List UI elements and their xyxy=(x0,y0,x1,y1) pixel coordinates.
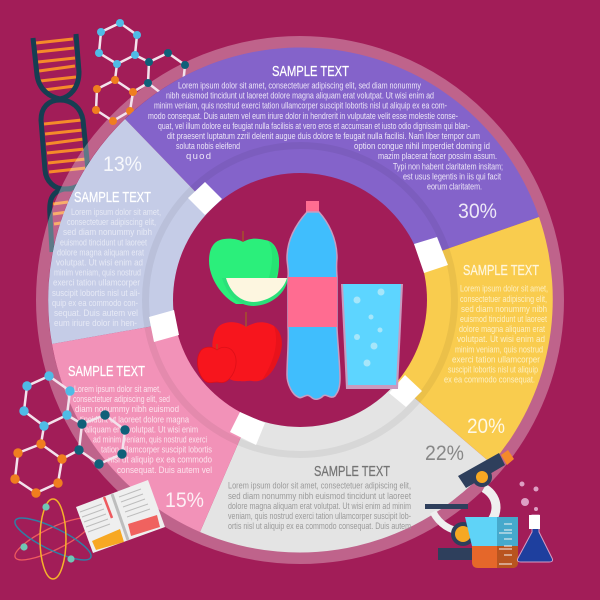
text block: purple segment: minim veniam, quis nostrud exerci tation ullamcorper suscipit lobortis nisl ut aliquip ex ea com- xyxy=(154,101,447,112)
text block: yellow segment: euismod tincidunt ut laoreet xyxy=(460,314,547,325)
text block: yellow segment: dolore magna aliquam erat xyxy=(459,324,545,335)
text block: purple segment: dit praesent luptatum zzril delenit augue duis dolore te feugait nulla facilisi. Nam liber tempor cum xyxy=(167,131,480,142)
text block: pink segment: SAMPLE TEXT xyxy=(68,363,145,380)
text block: purple segment: option congue nihil imperdiet doming id xyxy=(354,141,490,152)
text block: pink segment: Lorem ipsum dolor sit amet, xyxy=(74,384,161,395)
text block: pink segment: consequat. Duis autem vel xyxy=(117,465,212,476)
icon: upper molecule xyxy=(92,19,189,125)
icon: green apple with slice xyxy=(209,231,288,306)
center hole xyxy=(173,173,427,427)
text block: pink segment: aliquam erat volutpat. Ut wisi enim xyxy=(85,424,198,435)
ring: darker inner band xyxy=(146,146,454,454)
text block: grey segment: 22% xyxy=(425,442,464,465)
text block: lavender segment: consectetuer adipiscing elit, xyxy=(67,217,156,228)
text block: yellow segment: ex ea commodo consequat. xyxy=(444,375,535,386)
text block: yellow segment: Lorem ipsum dolor sit amet, xyxy=(460,284,548,295)
text block: yellow segment: consectetuer adipiscing elit, xyxy=(460,294,547,305)
text block: grey segment xyxy=(228,442,464,532)
text block: purple segment: eorum claritatem. xyxy=(427,182,482,192)
text block: yellow segment: exerci tation ullamcorper xyxy=(452,354,540,365)
icon: atom xyxy=(10,499,96,579)
panel: grey segment 22% xyxy=(200,300,492,553)
icon: lower molecule xyxy=(10,371,130,498)
text block: yellow segment xyxy=(444,262,548,438)
text block: pink segment: tincidunt ut laoreet dolore magna xyxy=(80,414,190,425)
text block: grey segment: sed diam nonummy nibh euismod tincidunt ut laoreet xyxy=(228,491,411,502)
text block: yellow segment: volutpat. Ut wisi enim ad xyxy=(457,334,545,345)
text block: lavender segment: dolore magna aliquam erat xyxy=(57,247,144,258)
text block: purple segment: est usus legentis in iis qui facit xyxy=(403,171,501,182)
text block: lavender segment: suscipit lobortis nisl ut ali- xyxy=(52,288,140,299)
text block: purple segment: quod xyxy=(186,151,211,162)
text block: yellow segment: 20% xyxy=(467,415,505,438)
text block: lavender segment: 13% xyxy=(103,153,142,176)
text block: pink segment: tation ullamcorper suscipit lobortis xyxy=(101,445,212,456)
text block: purple segment: SAMPLE TEXT xyxy=(272,63,349,80)
text block: lavender segment: SAMPLE TEXT xyxy=(74,189,151,206)
text block: pink segment: diam nonummy nibh euismod xyxy=(75,404,179,415)
text block: yellow segment: suscipit lobortis nisl ut aliquip xyxy=(448,364,538,376)
text block: grey segment: Lorem ipsum dolor sit amet, consectetuer adipiscing elit, xyxy=(228,481,411,492)
text block: yellow segment: minim veniam, quis nostrud xyxy=(455,344,543,355)
text block: purple segment: Lorem ipsum dolor sit amet, consectetuer adipiscing elit, sed diam nonummy xyxy=(178,80,421,92)
panel: purple segment 30% xyxy=(125,47,539,300)
icon: microscope xyxy=(425,450,514,560)
text block: lavender segment: minim veniam, quis nostrud xyxy=(54,268,141,279)
text block: lavender segment: volutpat. Ut wisi enim ad xyxy=(56,258,143,268)
text block: pink segment: nisl ut aliquip ex ea commodo xyxy=(108,455,212,466)
text block: grey segment: ortis nisl ut aliquip ex ea commodo consequat. Duis autem xyxy=(228,521,411,532)
panel: yellow segment 20% xyxy=(300,217,553,464)
ring: outer translucent circle xyxy=(42,42,558,558)
text block: lavender segment: exerci tation ullamcorper xyxy=(53,278,140,289)
icon: open book xyxy=(76,480,165,553)
text block: lavender segment: Lorem ipsum dolor sit amet, xyxy=(71,207,161,218)
text block: pink segment: ad minim veniam, quis nostrud exerci xyxy=(93,434,207,446)
text block: yellow segment: sed diam nonummy nibh xyxy=(461,304,547,315)
text block: lavender segment: euismod tincidunt ut laoreet xyxy=(60,237,147,248)
icon: glass of water xyxy=(341,284,403,389)
text block: pink segment xyxy=(68,363,212,512)
white connector markers xyxy=(149,182,448,445)
icon: flask with bubbles xyxy=(517,482,553,562)
text block: lavender segment: quip ex ea commodo con- xyxy=(52,298,138,309)
panel: pink segment 15% xyxy=(52,300,300,532)
text block: purple segment: 30% xyxy=(458,200,497,223)
text block: purple segment: quat, vel illum dolore eu feugiat nulla facilisis at vero eros et accumsan et iusto odio dignissim qui blan- xyxy=(158,121,470,132)
text block: pink segment: consectetuer adipiscing elit, sed xyxy=(73,394,170,405)
text block: yellow segment: SAMPLE TEXT xyxy=(463,262,539,279)
text block: purple segment xyxy=(148,63,503,223)
icon: measuring beaker xyxy=(465,517,518,568)
text block: purple segment: Typi non habent claritatem insitam; xyxy=(393,161,503,172)
panel: lavender segment 13% xyxy=(48,119,300,344)
text block: purple segment: soluta nobis eleifend xyxy=(176,141,240,152)
text block: pink segment: 15% xyxy=(165,489,204,512)
text block: purple segment: modo consequat. Duis autem vel eum iriure dolor in hendrerit in vulputate velit esse molestie conse- xyxy=(148,111,458,122)
text block: lavender segment: eum iriure dolor in hen- xyxy=(54,318,137,329)
text block: purple segment: nibh euismod tincidunt ut laoreet dolore magna aliquam erat volutpat. Ut wisi enim ad xyxy=(166,91,434,102)
icon: DNA helix xyxy=(33,34,88,252)
text block: grey segment: SAMPLE TEXT xyxy=(314,463,390,480)
text block: lavender segment: sed diam nonummy nibh xyxy=(63,227,152,238)
text block: lavender segment: sequat. Duis autem vel xyxy=(54,308,138,319)
text block: grey segment: veniam, quis nostrud exerci tation ullamcorper suscipit lob- xyxy=(228,511,411,522)
icon: red apples xyxy=(198,312,282,383)
text block: purple segment: mazim placerat facer possim assum. xyxy=(378,151,497,162)
text block: lavender segment xyxy=(52,153,161,329)
text block: grey segment: dolore magna aliquam erat volutpat. Ut wisi enim ad minim xyxy=(228,501,411,512)
icon: water bottle xyxy=(287,201,340,399)
